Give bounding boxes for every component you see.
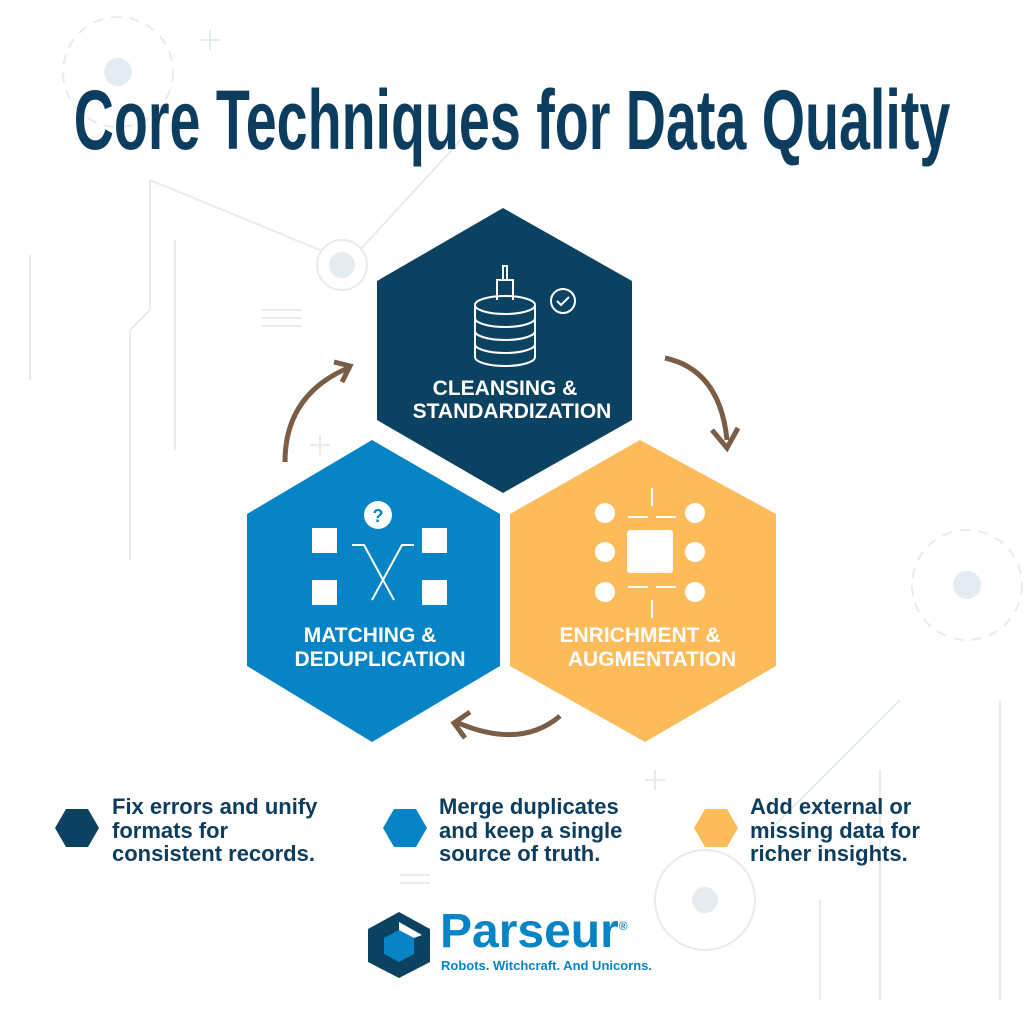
panel: matching hexagon: DEDUPLICATION	[294, 648, 466, 671]
panel: enrichment hexagon: AUGMENTATION	[568, 648, 736, 671]
legend: matching text	[439, 794, 622, 866]
title: Core Techniques for Data Quality	[74, 73, 950, 167]
logo	[368, 905, 652, 978]
panel: enrichment hexagon	[510, 440, 776, 742]
panel: matching hexagon	[247, 440, 500, 742]
arrow: top right	[665, 358, 727, 440]
text: cleansing label: CLEANSING &	[433, 377, 577, 400]
arrow: left	[285, 368, 348, 462]
legend: enrichment text: missing data for	[750, 818, 920, 842]
legend: matching text: source of truth.	[439, 841, 600, 866]
legend: cleansing text: consistent records.	[112, 841, 315, 866]
legend: enrichment text: Add external or	[750, 794, 911, 819]
text: matching label: MATCHING &	[304, 624, 436, 647]
legend: enrichment text: richer insights.	[750, 841, 908, 866]
icon: parseur cube	[368, 912, 430, 978]
panel: cleansing hexagon	[377, 208, 632, 493]
panel: cleansing hexagon: STANDARDIZATION	[413, 400, 611, 423]
legend: matching text: and keep a single	[439, 818, 622, 842]
text: enrichment label: ENRICHMENT &	[560, 624, 720, 647]
arrow: bottom	[456, 716, 560, 735]
icon: puzzle pieces	[312, 501, 447, 605]
icon: database brush	[475, 266, 575, 366]
text: Parseur: Parseur®	[440, 905, 628, 958]
legend: cleansing text: Fix errors and unify	[112, 794, 317, 819]
legend: enrichment text	[750, 794, 920, 866]
legend: cleansing text: formats for	[112, 818, 228, 842]
legend: matching text: Merge duplicates	[439, 794, 619, 819]
icon: briefcase with dots	[595, 503, 705, 602]
panel: matching hexagon: ?	[372, 506, 384, 526]
legend icons	[55, 809, 99, 847]
legend: cleansing text	[112, 794, 318, 866]
text: tagline: Robots. Witchcraft. And Unicorns.	[441, 958, 652, 973]
